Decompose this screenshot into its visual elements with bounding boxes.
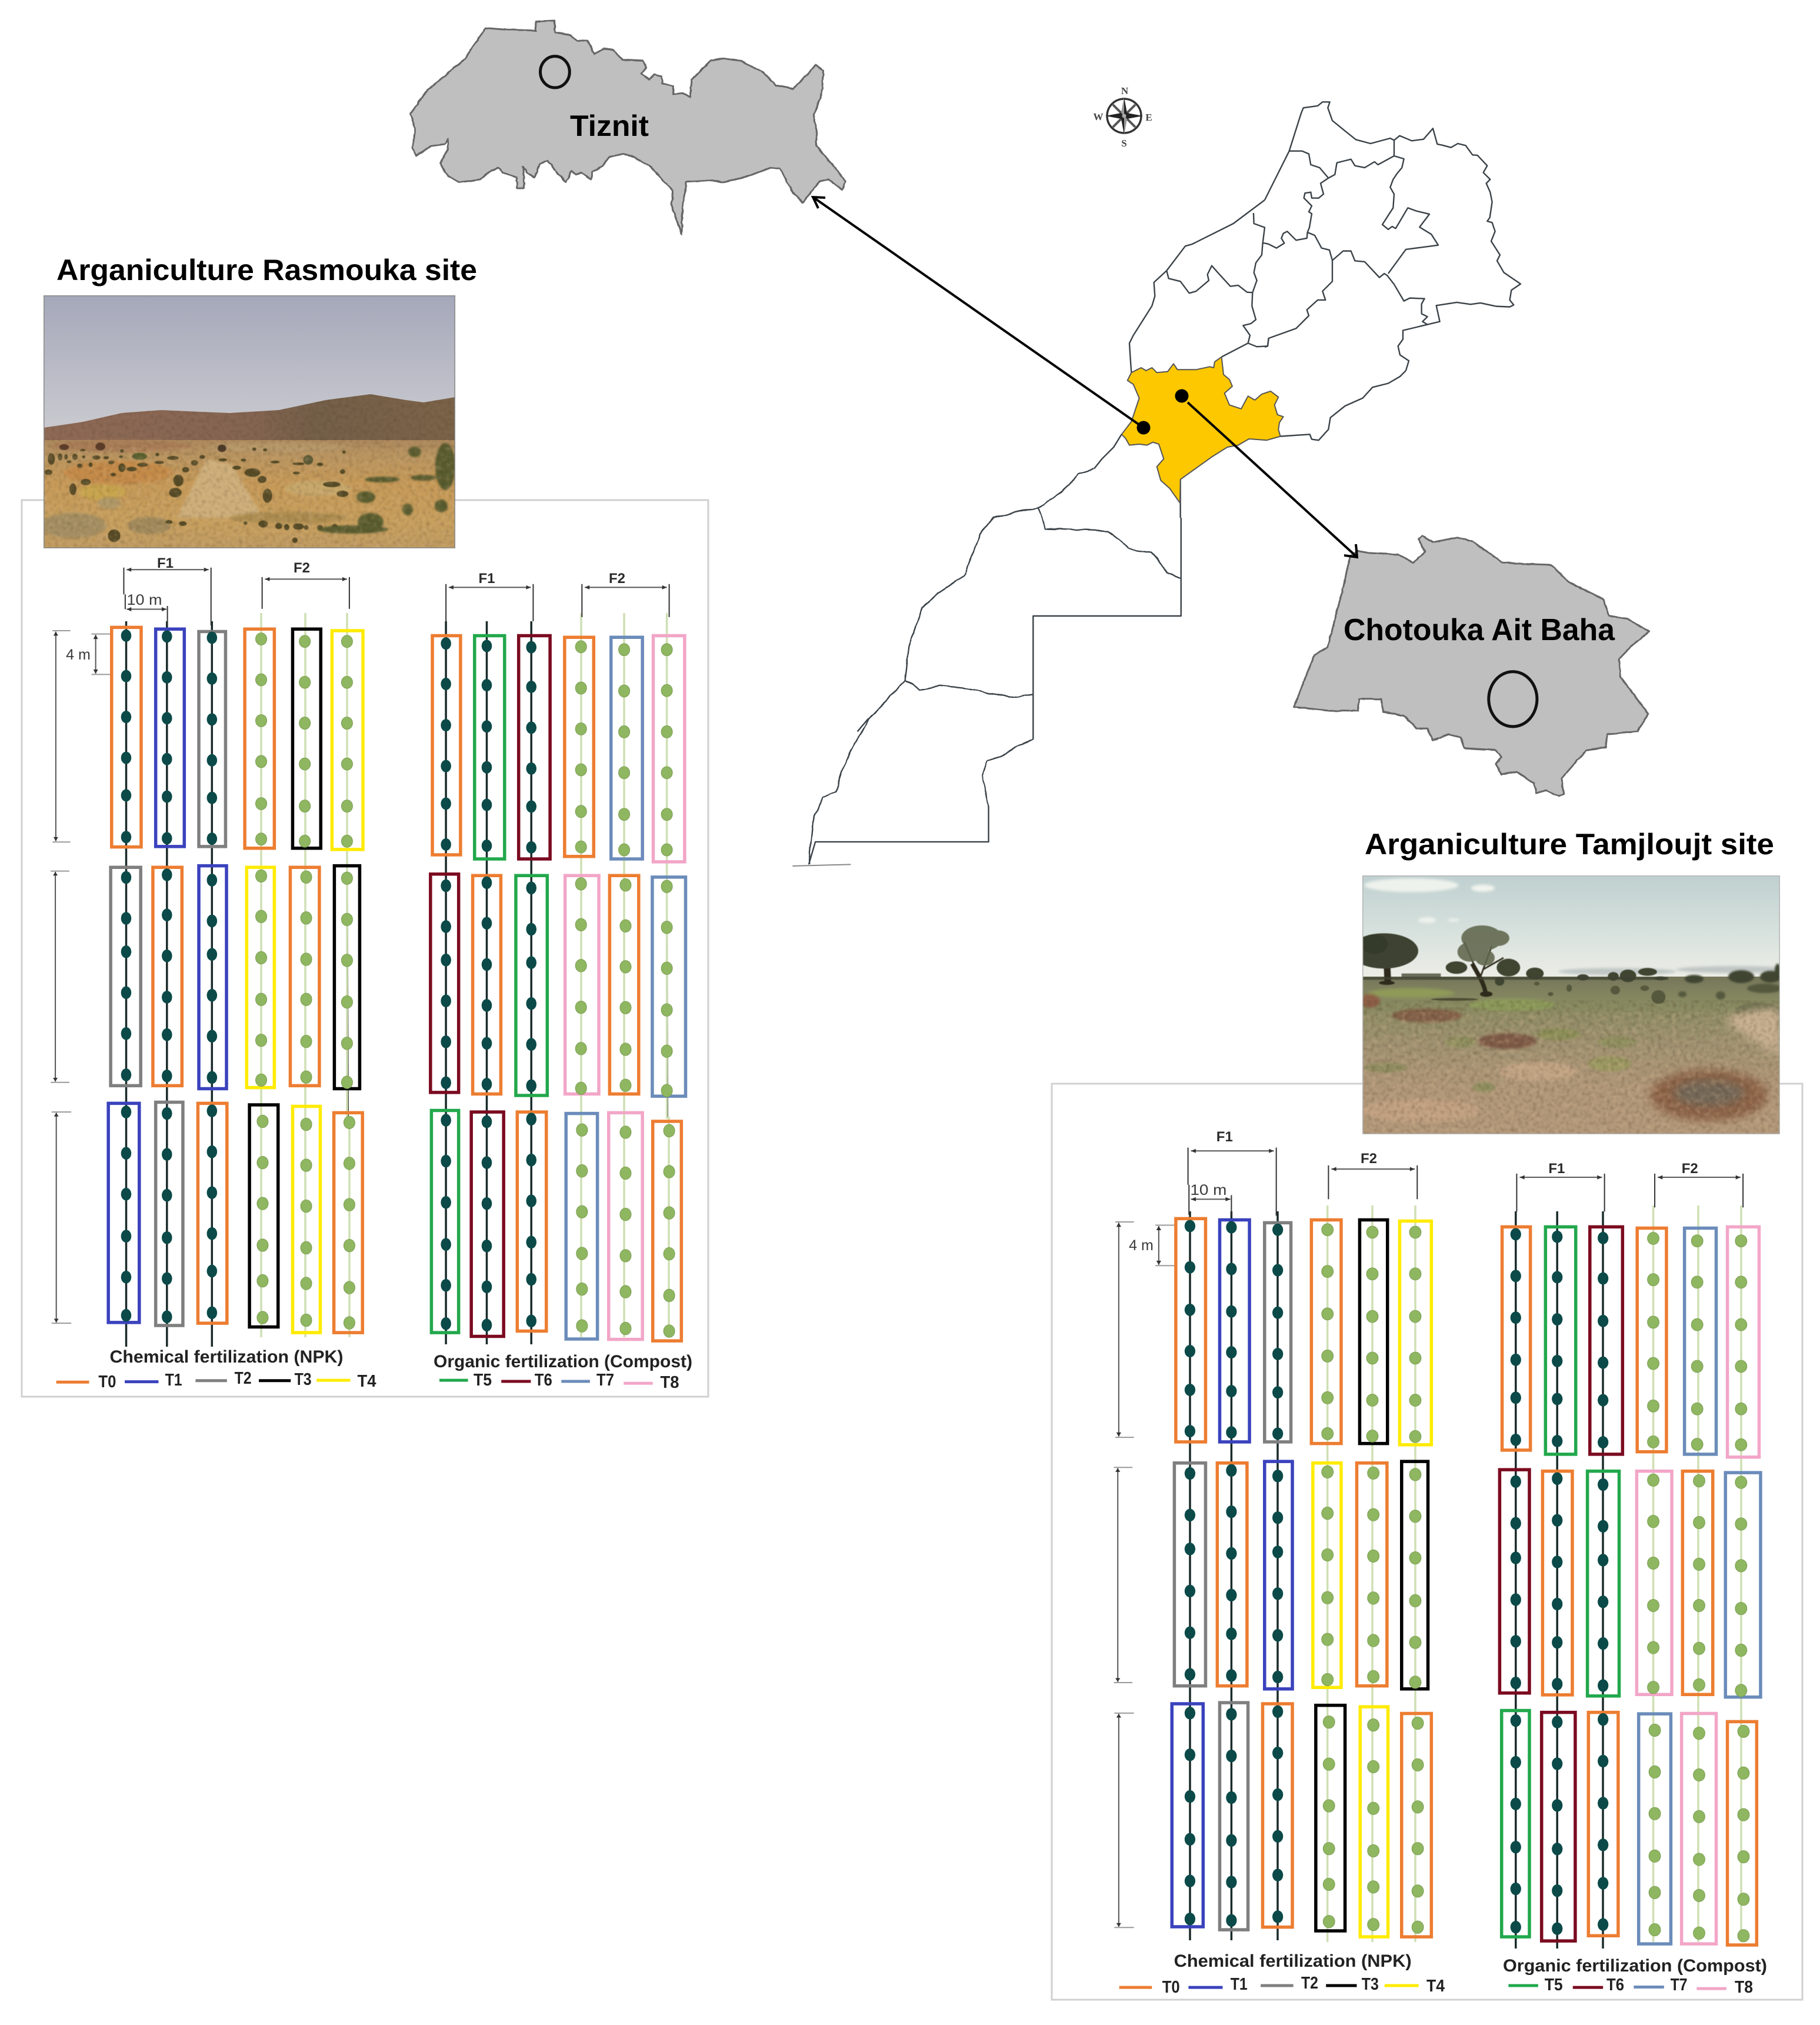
icon: Tamjloujt site circle bbox=[1489, 672, 1537, 727]
label: Organic fertilization (Compost): Organic fertilization (Compost) bbox=[434, 1352, 692, 1371]
icon: compass rose: E bbox=[1145, 112, 1152, 123]
legend labels Tamjloujt: T7 bbox=[1671, 1976, 1688, 1994]
northern and eastern region boundaries bbox=[1265, 102, 1521, 371]
plots: replicate 1 Rasmouka bbox=[112, 627, 685, 862]
highlighted region: Souss-Massa bbox=[1122, 357, 1284, 503]
legend labels Tamjloujt: T3 bbox=[1362, 1975, 1379, 1994]
heading: Arganiculture Rasmouka site: Arganiculture Rasmouka site bbox=[56, 254, 477, 287]
legend labels Rasmouka: T0 bbox=[98, 1373, 116, 1391]
legend lines Rasmouka bbox=[56, 1380, 653, 1383]
legend labels Tamjloujt: T2 bbox=[1301, 1974, 1318, 1993]
dimension annotations Rasmouka lower bbox=[51, 871, 71, 1323]
icon: Tiznit site circle bbox=[541, 56, 569, 88]
icon: compass rose: N bbox=[1121, 85, 1129, 96]
label: F1 chemical: F1 bbox=[157, 555, 174, 571]
label: Chotouka Ait Baha: Chotouka Ait Baha bbox=[1344, 613, 1615, 647]
icon: compass rose bbox=[1093, 85, 1152, 149]
label: F2 chemical: F2 bbox=[294, 560, 310, 576]
legend labels Rasmouka: T7 bbox=[596, 1371, 614, 1390]
plots: replicates 2 and 3 Tamjloujt bbox=[1172, 1461, 1761, 1945]
legend labels Tamjloujt bbox=[1162, 1974, 1753, 1997]
dimension annotations Tamjloujt lower bbox=[1114, 1467, 1134, 1927]
dimension annotations Rasmouka upper bbox=[52, 568, 669, 842]
legend labels Tamjloujt: T1 bbox=[1231, 1975, 1248, 1994]
panel: Tamjloujt experimental layout frame bbox=[1052, 1084, 1802, 2000]
legend labels Tamjloujt: T5 bbox=[1545, 1976, 1563, 1994]
legend labels Tamjloujt: T6 bbox=[1606, 1976, 1624, 1994]
label: Chemical fertilization (NPK): Chemical fertilization (NPK) bbox=[1174, 1951, 1412, 1971]
dimension annotations Tamjloujt upper bbox=[1115, 1148, 1743, 1437]
legend labels Rasmouka: T3 bbox=[295, 1370, 312, 1389]
heading: Arganiculture Tamjloujt site: Arganiculture Tamjloujt site bbox=[1365, 828, 1774, 861]
arrow: region to Tiznit bbox=[813, 197, 1144, 428]
legend labels Rasmouka: T5 bbox=[474, 1371, 492, 1390]
label: F2 chemical: F2 bbox=[1361, 1151, 1377, 1167]
label: Organic fertilization (Compost): Organic fertilization (Compost) bbox=[1503, 1956, 1767, 1976]
legend labels Tamjloujt: T8 bbox=[1735, 1978, 1753, 1997]
arrow: region to Chotouka Ait Baha bbox=[1188, 402, 1357, 557]
map: Tiznit province bbox=[411, 21, 846, 234]
label: Chemical fertilization (NPK): Chemical fertilization (NPK) bbox=[109, 1347, 344, 1367]
icon: compass rose: S bbox=[1121, 138, 1127, 149]
legend labels Tamjloujt: T4 bbox=[1426, 1977, 1445, 1996]
label: F1 organic: F1 bbox=[1548, 1161, 1565, 1177]
plots: replicate 1 Tamjloujt bbox=[1176, 1218, 1759, 1457]
icon: Chotouka location dot bbox=[1175, 389, 1188, 402]
legend labels Rasmouka: T4 bbox=[358, 1372, 376, 1391]
tree row stems Rasmouka bbox=[126, 613, 669, 1347]
tree row stems Tamjloujt bbox=[1190, 1205, 1741, 1949]
central region boundaries bbox=[1094, 200, 1406, 518]
legend labels Rasmouka: T2 bbox=[235, 1369, 252, 1388]
legend labels Rasmouka: T6 bbox=[535, 1371, 552, 1390]
photo: Rasmouka site landscape bbox=[39, 295, 455, 548]
photo: Tamjloujt site landscape bbox=[1349, 875, 1794, 1134]
label: Tiznit: Tiznit bbox=[570, 109, 649, 142]
map: Chtouka Ait Baha province bbox=[1294, 536, 1649, 796]
label: F2 organic: F2 bbox=[1682, 1161, 1698, 1177]
chart: Rasmouka planting scheme bbox=[51, 555, 692, 1392]
icon: compass rose: W bbox=[1093, 111, 1104, 122]
legend labels Rasmouka: T1 bbox=[165, 1371, 182, 1390]
southern region boundaries bbox=[792, 468, 1181, 866]
map: Morocco regions bbox=[792, 102, 1521, 866]
label: F1 organic: F1 bbox=[478, 571, 495, 587]
chart: Tamjloujt planting scheme bbox=[1114, 1129, 1767, 1997]
plots: replicates 2 and 3 Rasmouka bbox=[108, 866, 686, 1341]
label: 4 m: 4 m bbox=[66, 647, 91, 663]
legend labels Rasmouka bbox=[98, 1369, 679, 1392]
legend labels Rasmouka: T8 bbox=[660, 1373, 679, 1392]
label: F1 chemical: F1 bbox=[1216, 1129, 1233, 1145]
label: 10 m: 10 m bbox=[1190, 1182, 1226, 1198]
label: 10 m: 10 m bbox=[127, 592, 162, 608]
label: F2 organic: F2 bbox=[609, 571, 625, 587]
legend lines Tamjloujt bbox=[1119, 1986, 1726, 1989]
legend labels Tamjloujt: T0 bbox=[1162, 1978, 1180, 1997]
panel: Rasmouka experimental layout frame bbox=[22, 500, 708, 1397]
label: 4 m: 4 m bbox=[1129, 1237, 1154, 1254]
icon: Tiznit location dot bbox=[1136, 421, 1151, 434]
